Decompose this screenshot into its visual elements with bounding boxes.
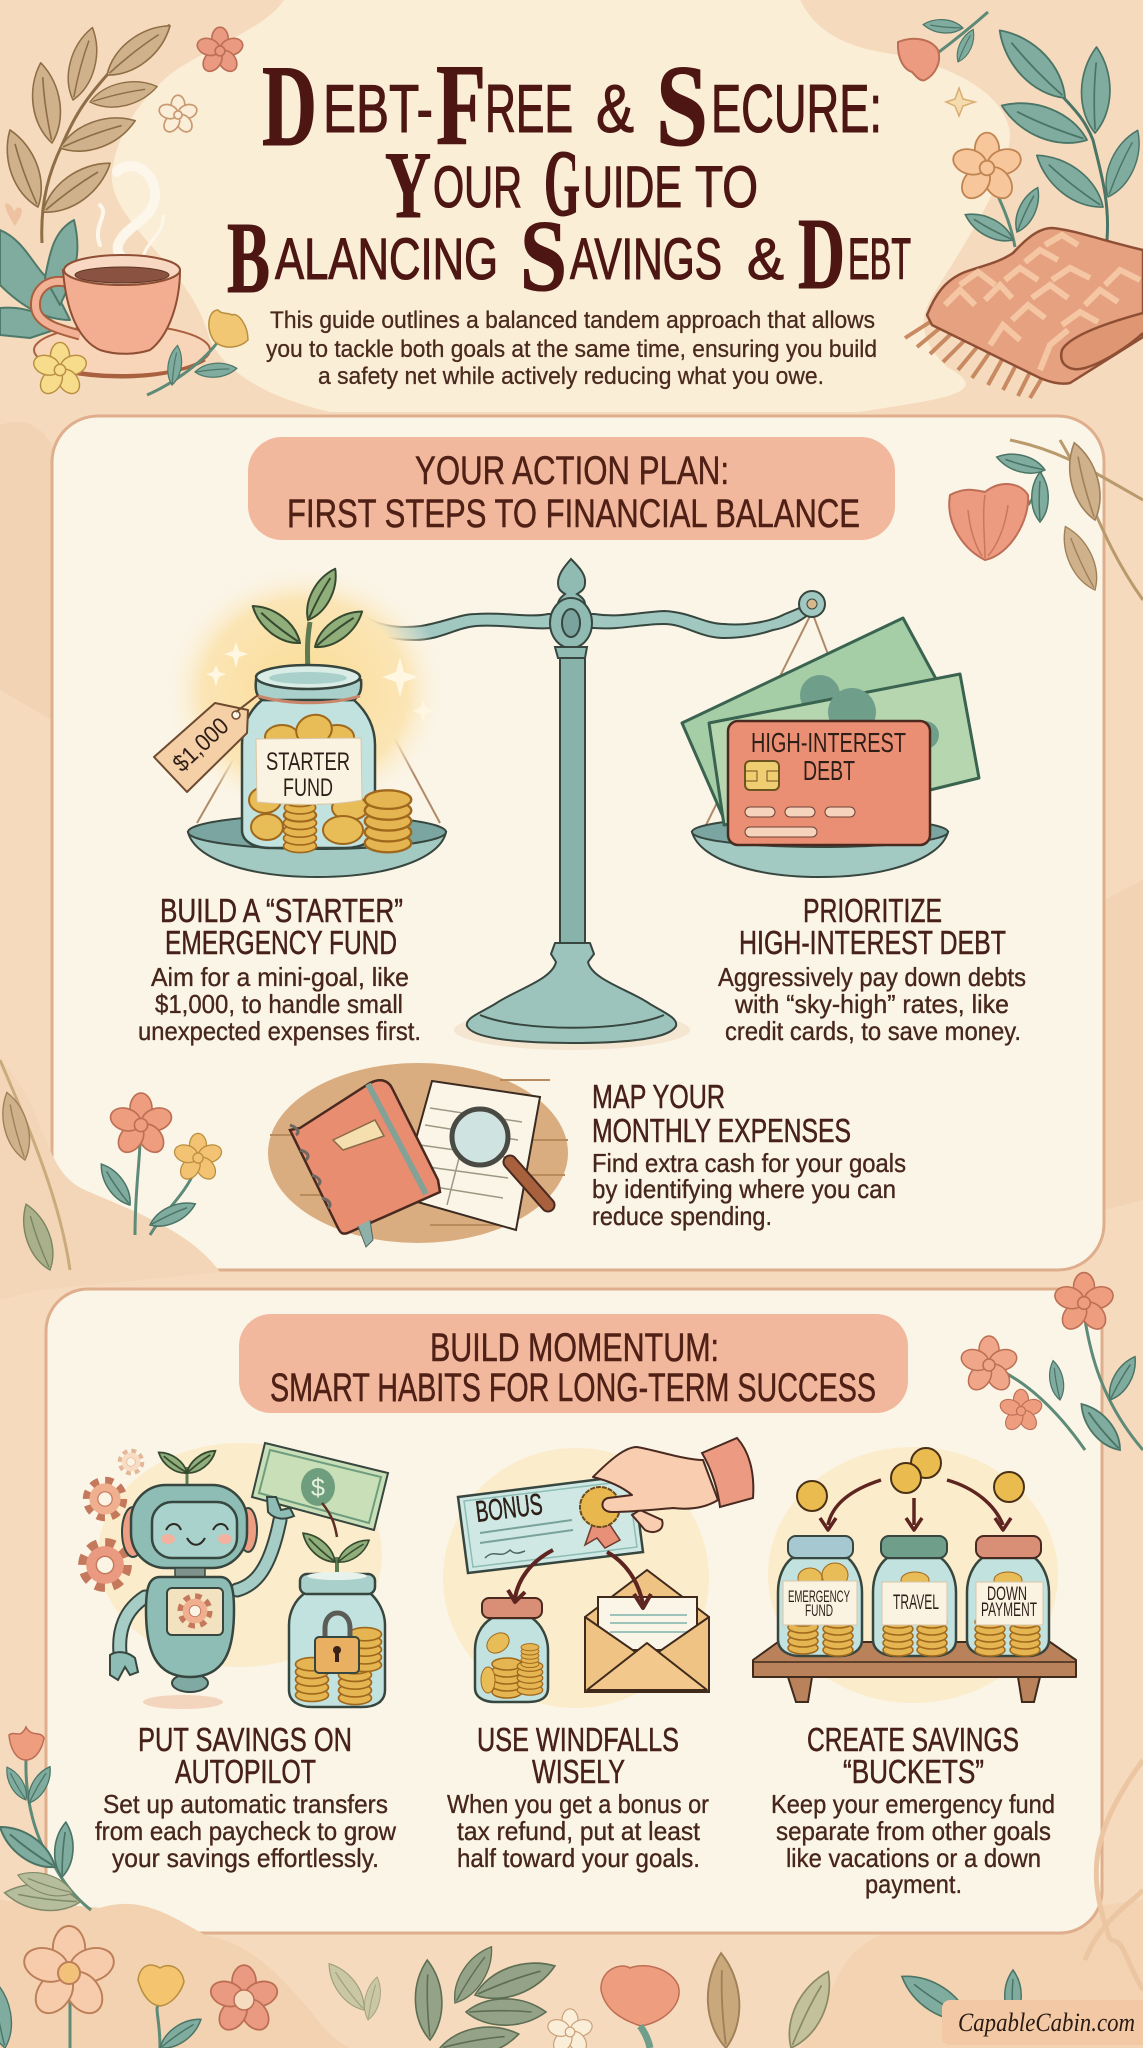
title line 3: ALANCING bbox=[275, 227, 498, 292]
title line 1: EBT- bbox=[323, 71, 433, 147]
pill heading: build momentum: SMART HABITS FOR LONG-TERM SUCCESS bbox=[270, 1366, 876, 1410]
paper bbox=[400, 1081, 540, 1230]
robot sprout bbox=[155, 1446, 219, 1485]
sprout bbox=[247, 564, 368, 678]
pill heading: build momentum bbox=[239, 1314, 908, 1413]
step: high-interest debt text: HIGH-INTEREST DEBT bbox=[739, 924, 1006, 961]
title line 3: B bbox=[227, 202, 270, 315]
step: buckets text: like vacations or a down bbox=[786, 1843, 1041, 1873]
pill heading: action plan: YOUR ACTION PLAN: bbox=[415, 449, 729, 493]
decoration: left edge flower bbox=[0, 1727, 350, 2048]
step: autopilot text: from each paycheck to grow bbox=[95, 1816, 396, 1846]
robot arms bbox=[120, 1520, 280, 1653]
step: autopilot text: your savings effortlessly. bbox=[112, 1843, 379, 1873]
step: buckets text: CREATE SAVINGS bbox=[807, 1721, 1019, 1758]
finial bbox=[558, 559, 585, 604]
bill bbox=[252, 1443, 388, 1530]
falling coins bbox=[797, 1448, 1024, 1511]
step: high-interest debt text bbox=[718, 892, 1026, 1046]
icon: high-interest debt card: HIGH-INTEREST bbox=[751, 727, 906, 758]
magnifier bbox=[510, 1162, 548, 1205]
strings bbox=[197, 612, 868, 825]
decoration: bottom garden bbox=[0, 1760, 1143, 2048]
credit card bbox=[728, 721, 930, 845]
envelope bbox=[585, 1570, 709, 1692]
icon: savings bucket jars on shelf bbox=[753, 1447, 1076, 1703]
beam bbox=[367, 605, 809, 640]
title line 1: ECURE: bbox=[711, 71, 882, 147]
yellow flowers bbox=[31, 342, 89, 398]
step: starter fund text: Aim for a mini-goal, like bbox=[151, 962, 409, 992]
title line 1: F bbox=[436, 41, 486, 170]
step: windfalls text: When you get a bonus or bbox=[447, 1789, 709, 1819]
decoration: panel right flowers bbox=[959, 1273, 1143, 1456]
shelf bbox=[753, 1642, 1076, 1702]
arrows bbox=[820, 1480, 1011, 1530]
front bill bbox=[709, 674, 979, 825]
step: monthly expenses text: Find extra cash for your goals bbox=[592, 1148, 906, 1178]
step: buckets text: payment. bbox=[865, 1869, 962, 1899]
step: starter fund text bbox=[138, 892, 421, 1046]
step: starter fund text: BUILD A “STARTER” bbox=[160, 892, 403, 929]
step: windfalls text: USE WINDFALLS bbox=[477, 1721, 679, 1758]
step: windfalls text: half toward your goals. bbox=[457, 1843, 700, 1873]
steam bbox=[117, 166, 155, 275]
icon: notebook and magnifier bbox=[268, 1063, 568, 1247]
title line 1: REE bbox=[485, 71, 573, 147]
step: starter fund text: EMERGENCY FUND bbox=[165, 924, 397, 961]
step: monthly expenses text: reduce spending. bbox=[592, 1201, 772, 1231]
price tag bbox=[154, 695, 258, 792]
icon: knitted blanket bbox=[903, 228, 1143, 398]
locked jar bbox=[289, 1528, 385, 1707]
icon: starter fund jar: FUND bbox=[283, 774, 333, 802]
pan: left bbox=[188, 815, 446, 877]
title line 2: G bbox=[544, 130, 580, 236]
pill heading: action plan bbox=[248, 437, 895, 540]
step: high-interest debt text: PRIORITIZE bbox=[803, 892, 942, 929]
coins in jar bbox=[249, 711, 368, 844]
price tag: $1,000 bbox=[168, 713, 234, 777]
saucer bbox=[34, 325, 210, 375]
title line 3: & bbox=[747, 227, 784, 292]
notebook bbox=[290, 1080, 440, 1234]
intro text bbox=[266, 307, 877, 390]
icon: robot and jar bbox=[83, 1443, 388, 1709]
arrows bbox=[508, 1550, 651, 1608]
intro text: This guide outlines a balanced tandem approach that allows bbox=[270, 307, 875, 334]
coin stack bbox=[365, 790, 411, 852]
step: autopilot text: PUT SAVINGS ON bbox=[138, 1721, 352, 1758]
title line 1: D bbox=[262, 42, 317, 171]
decoration: heart bbox=[5, 204, 22, 226]
panel: build momentum bbox=[46, 1273, 1143, 1933]
step: autopilot text: Set up automatic transfers bbox=[103, 1789, 388, 1819]
jar: down payment: PAYMENT bbox=[981, 1600, 1037, 1621]
jar: travel: TRAVEL bbox=[893, 1591, 939, 1614]
step: high-interest debt text: credit cards, to save money. bbox=[725, 1016, 1021, 1046]
title line 3: EBT bbox=[848, 227, 911, 292]
decoration: sparkle bbox=[946, 88, 975, 116]
intro text: you to tackle both goals at the same time, ensuring you build bbox=[266, 336, 877, 363]
check: BONUS bbox=[474, 1488, 544, 1529]
title line 1: S bbox=[656, 42, 708, 171]
jar label bbox=[256, 738, 362, 804]
panel: action plan bbox=[52, 416, 1143, 1270]
step: monthly expenses text: by identifying where you can bbox=[592, 1174, 896, 1204]
decoration: left tan branch bbox=[0, 15, 178, 243]
decoration: coral flower top left bbox=[195, 27, 245, 75]
step: autopilot text: AUTOPILOT bbox=[175, 1753, 316, 1790]
icon: starter fund jar bbox=[154, 564, 447, 877]
robot head bbox=[122, 1485, 257, 1568]
small jar bbox=[475, 1598, 548, 1702]
bill: $ bbox=[311, 1474, 325, 1502]
title line 1: & bbox=[596, 71, 634, 147]
icon: starter fund jar: STARTER bbox=[266, 748, 350, 776]
jar body bbox=[242, 700, 375, 848]
step: monthly expenses text: MONTHLY EXPENSES bbox=[592, 1112, 851, 1149]
jar: emergency fund: FUND bbox=[805, 1601, 833, 1620]
jar: down payment bbox=[967, 1536, 1049, 1656]
jar: emergency fund bbox=[778, 1536, 862, 1656]
handle bbox=[35, 281, 80, 335]
step: starter fund text: $1,000, to handle small bbox=[155, 989, 403, 1019]
teal leaves behind cup bbox=[0, 220, 77, 338]
title line 2: Y bbox=[385, 132, 431, 238]
step: windfalls text bbox=[447, 1721, 709, 1873]
jar: emergency fund: EMERGENCY bbox=[788, 1587, 850, 1606]
title line 2: TO bbox=[695, 155, 758, 220]
decoration: coral flower top right bbox=[898, 12, 988, 80]
icon: high-interest debt card bbox=[682, 618, 979, 877]
pivot ring bbox=[799, 591, 825, 617]
jar: down payment: DOWN bbox=[987, 1584, 1027, 1605]
chip bbox=[745, 761, 779, 790]
icon: bonus check, jar and envelope bbox=[443, 1438, 753, 1708]
step: monthly expenses text bbox=[592, 1078, 906, 1231]
decoration: teal branch top right bbox=[989, 20, 1143, 240]
decoration: peach flower right bbox=[950, 133, 1045, 248]
intro text: a safety net while actively reducing what you owe. bbox=[318, 363, 824, 390]
gears bbox=[87, 1481, 123, 1517]
step: buckets text: “BUCKETS” bbox=[843, 1753, 984, 1790]
step: high-interest debt text: Aggressively pay down debts bbox=[718, 962, 1026, 992]
title line 3: S bbox=[520, 200, 567, 313]
icon: high-interest debt card: DEBT bbox=[803, 755, 855, 786]
decoration: panel right flower bbox=[949, 439, 1143, 600]
decoration: left flowers on panel edge bbox=[0, 1060, 224, 1300]
back bill bbox=[682, 618, 942, 819]
watermark badge bbox=[942, 2000, 1143, 2045]
robot body bbox=[146, 1577, 234, 1692]
step: buckets text bbox=[771, 1721, 1055, 1899]
step: autopilot text bbox=[95, 1721, 396, 1873]
pill heading: action plan: FIRST STEPS TO FINANCIAL BALANCE bbox=[287, 492, 860, 536]
title line 2: OUR bbox=[433, 155, 522, 220]
icon: coffee cup bbox=[0, 166, 248, 398]
step: windfalls text: tax refund, put at least bbox=[457, 1816, 701, 1846]
decoration: small outline flower bbox=[157, 95, 199, 135]
step: starter fund text: unexpected expenses first. bbox=[138, 1016, 421, 1046]
check bbox=[458, 1475, 643, 1573]
step: buckets text: separate from other goals bbox=[776, 1816, 1051, 1846]
step: windfalls text: WISELY bbox=[532, 1753, 625, 1790]
title line 3: D bbox=[798, 198, 845, 311]
title line 2: UIDE bbox=[583, 155, 682, 220]
step: high-interest debt text: with “sky-high” rates, like bbox=[734, 989, 1009, 1019]
title bbox=[227, 41, 911, 315]
pill heading: build momentum: BUILD MOMENTUM: bbox=[430, 1326, 719, 1370]
jar: travel bbox=[873, 1536, 956, 1656]
icon: balance scale bbox=[197, 559, 868, 1050]
cable braid pattern bbox=[945, 235, 1078, 305]
step: buckets text: Keep your emergency fund bbox=[771, 1789, 1055, 1819]
base bbox=[467, 943, 676, 1043]
title line 3: AVINGS bbox=[570, 227, 722, 292]
hand bbox=[593, 1438, 753, 1532]
step: monthly expenses text: MAP YOUR bbox=[592, 1078, 725, 1115]
